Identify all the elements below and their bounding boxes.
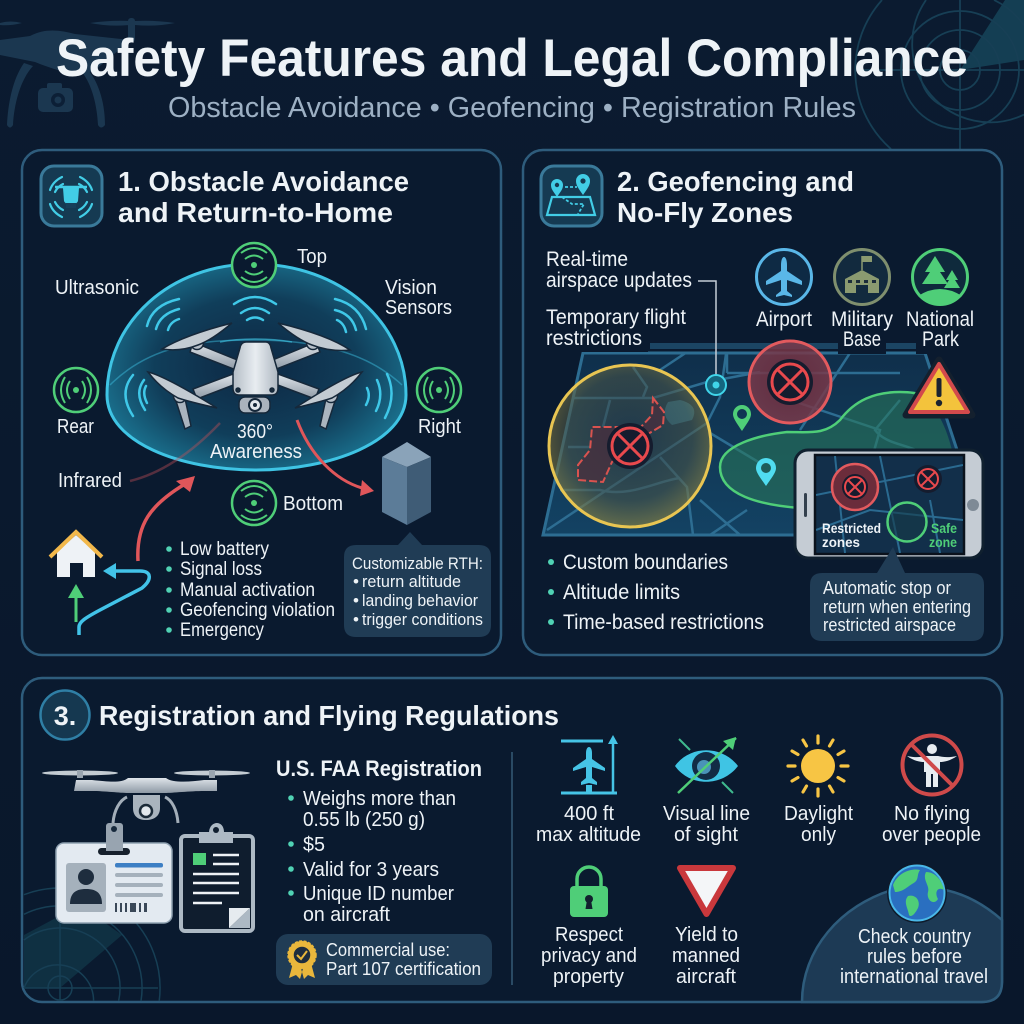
geofencing features list: Time-based restrictions — [563, 611, 764, 634]
phone showing restricted zones: Restricted — [822, 520, 881, 536]
heading: 2. Geofencing and — [617, 166, 854, 197]
callout: automatic stop: return when entering — [823, 597, 971, 617]
sensor labels: Top — [297, 245, 327, 268]
rule: respect privacy: privacy and — [541, 944, 637, 967]
background radar top right — [855, 0, 1024, 149]
labels: restricted places: Park — [922, 328, 959, 351]
heading — [617, 166, 854, 228]
labels: temporary restrictions and updates: Real-time — [546, 248, 628, 271]
phone showing restricted zones: zones — [822, 534, 860, 550]
section number — [40, 690, 90, 740]
rule: no flying over people — [882, 736, 981, 846]
labels: temporary restrictions and updates: restrictions — [546, 327, 642, 350]
airspace update callout — [698, 281, 726, 395]
badge: Part 107 certification — [276, 934, 492, 985]
rule: yield to manned aircraft — [672, 868, 740, 988]
title: Safety Features and Legal Compliance — [56, 29, 968, 88]
rule: visual line of sight: of sight — [674, 823, 738, 846]
sensor: top — [232, 243, 276, 287]
sensor labels: Sensors — [385, 296, 452, 319]
rule: daylight only: Daylight — [784, 802, 853, 825]
red no-fly zone — [749, 341, 831, 423]
callout: customizable RTH: • — [353, 610, 359, 629]
rule: yield to manned aircraft: Yield to — [675, 923, 738, 946]
section number: 3. — [54, 701, 76, 731]
FAA registration list — [276, 756, 482, 926]
callout: customizable RTH: Customizable RTH: — [352, 554, 483, 573]
icon: yield sign — [680, 868, 733, 914]
callout: customizable RTH: • — [353, 591, 359, 610]
icon: warning — [906, 360, 972, 415]
labels: restricted places — [756, 308, 974, 354]
rule: daylight only — [784, 736, 853, 846]
rule: visual line of sight — [663, 737, 750, 846]
callout: international travel: international travel — [840, 965, 988, 988]
labels: temporary restrictions and updates — [544, 248, 692, 352]
badge: Part 107 certification: Commercial use: — [326, 940, 450, 960]
geofencing features list: Altitude limits — [563, 581, 680, 604]
FAA registration list: 0.55 lb (250 g) — [303, 808, 425, 831]
RTH triggers list: Signal loss — [180, 559, 262, 580]
badge: Part 107 certification: Part 107 certification — [326, 959, 481, 979]
rule: respect privacy: Respect — [555, 923, 623, 946]
obstacle box — [382, 442, 431, 525]
sensor labels: 360° — [237, 420, 273, 443]
icon: eye — [675, 737, 738, 793]
RTH triggers list: Manual activation — [180, 580, 315, 601]
subtitle: Obstacle Avoidance • Geofencing • Registration Rules — [168, 92, 856, 124]
sensor: rear — [54, 368, 98, 412]
panel: obstacle avoidance and return-to-home — [22, 150, 501, 655]
RTH triggers list: Emergency — [180, 620, 264, 641]
labels: restricted places: Base — [843, 328, 881, 351]
arrow: return path — [138, 476, 195, 561]
sensor labels: Right — [418, 415, 461, 438]
callout: international travel: Check country — [858, 925, 972, 948]
rule: yield to manned aircraft: aircraft — [676, 965, 736, 988]
rule: 400 ft: max altitude — [536, 823, 641, 846]
rule: yield to manned aircraft: manned — [672, 944, 740, 967]
icon: no people — [902, 736, 962, 794]
arrow: RTH path — [79, 563, 149, 635]
heading: Registration and Flying Regulations — [99, 700, 559, 731]
phone showing restricted zones — [795, 450, 983, 558]
rule: 400 ft: 400 ft — [564, 802, 614, 825]
phone showing restricted zones: Safe — [931, 520, 957, 536]
panel: registration and flying regulations — [22, 678, 1002, 1002]
pin: green — [733, 405, 751, 431]
icon: sun — [788, 736, 848, 796]
pin: cyan — [756, 458, 776, 486]
heading: 1. Obstacle Avoidance — [118, 166, 409, 197]
FAA registration list: $5 — [303, 833, 325, 856]
background drone watermark — [0, 18, 175, 128]
geofencing features list — [548, 551, 764, 634]
RTH triggers list: Low battery — [180, 539, 269, 560]
icon: padlock — [570, 867, 608, 917]
heading — [118, 166, 409, 228]
sensor labels: Rear — [57, 415, 94, 438]
drone: arms, propellers, body and camera — [148, 323, 362, 429]
arrow: infrared fading — [130, 423, 220, 481]
callout: customizable RTH: return altitude — [362, 572, 461, 591]
callout: customizable RTH: landing behavior — [362, 591, 478, 610]
icon: globe — [887, 863, 947, 923]
labels: temporary restrictions and updates: airspace updates — [546, 269, 692, 292]
panel: geofencing and no-fly zones — [523, 150, 1002, 655]
clipboard — [181, 823, 253, 931]
rule: daylight only: only — [801, 823, 837, 846]
RTH triggers list: Geofencing violation — [180, 600, 335, 621]
icon: airport — [756, 250, 812, 304]
heading: No-Fly Zones — [617, 197, 793, 228]
FAA registration list: Weighs more than — [303, 787, 456, 810]
labels: restricted places: Airport — [756, 308, 812, 331]
rule: 400 ft — [536, 735, 641, 846]
callout: international travel — [802, 863, 1002, 1002]
sensor waves — [126, 297, 392, 418]
rule: no flying over people: No flying — [894, 802, 970, 825]
sensor labels: Infrared — [58, 469, 122, 492]
sensor labels: Vision — [385, 276, 437, 299]
icon: medal — [288, 941, 316, 979]
home icon — [50, 532, 102, 577]
icon: altitude plane — [561, 735, 618, 793]
icon: drone sensing — [41, 166, 102, 226]
FAA registration list: Valid for 3 years — [303, 858, 439, 881]
yellow restricted zone — [549, 365, 711, 527]
sensor labels — [55, 245, 461, 515]
labels: temporary restrictions and updates: Temporary flight — [546, 306, 686, 329]
rule: no flying over people: over people — [882, 823, 981, 846]
sensor labels: Ultrasonic — [55, 276, 139, 299]
FAA registration list: U.S. FAA Registration — [276, 756, 482, 781]
callout: automatic stop: restricted airspace — [823, 615, 956, 635]
RTH triggers list — [166, 539, 335, 641]
callout: customizable RTH: • — [353, 572, 359, 591]
callout: automatic stop: Automatic stop or — [823, 578, 951, 598]
callout: automatic stop — [810, 547, 984, 641]
phone showing restricted zones: zone — [929, 534, 957, 550]
callout: customizable RTH: trigger conditions — [362, 610, 483, 629]
labels: restricted places: Military — [831, 308, 893, 331]
FAA registration list: on aircraft — [303, 903, 390, 926]
FAA registration list: Unique ID number — [303, 882, 454, 905]
map — [543, 343, 962, 535]
sensor labels: Bottom — [283, 492, 343, 515]
callout: customizable RTH — [344, 532, 491, 637]
heading: and Return-to-Home — [118, 197, 393, 228]
arrow: landing — [68, 584, 84, 622]
icon: military base — [834, 250, 890, 304]
green safe zone — [720, 392, 952, 510]
geofencing features list: Custom boundaries — [563, 551, 728, 574]
icon: map with pins — [541, 166, 602, 226]
rule: respect privacy — [541, 867, 637, 988]
callout: international travel: rules before — [867, 945, 962, 968]
icon: national park — [912, 250, 968, 305]
background radar — [24, 888, 160, 1001]
sensing dome — [107, 264, 406, 470]
arrow: avoid obstacle — [297, 420, 374, 496]
sensor labels: Awareness — [210, 440, 302, 463]
drone with ID tag — [42, 770, 250, 855]
labels: restricted places: National — [906, 308, 974, 331]
sensor: right — [417, 368, 461, 412]
sensor: bottom — [232, 481, 276, 525]
ID card — [56, 840, 172, 923]
rule: visual line of sight: Visual line — [663, 802, 750, 825]
rule: respect privacy: property — [553, 965, 625, 988]
